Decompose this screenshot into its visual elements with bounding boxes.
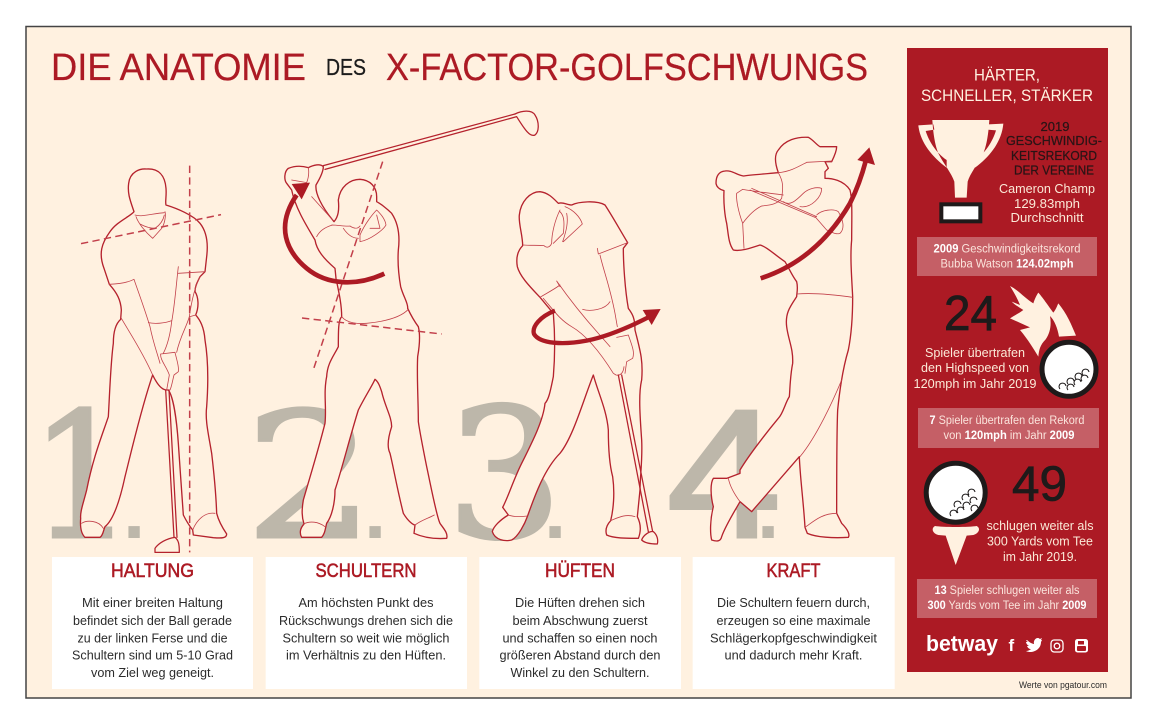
card: Kraft: Schlägerkopfgeschwindigkeit (710, 630, 877, 645)
stat: 24: 24 (944, 287, 997, 341)
step number 4: . (757, 466, 779, 555)
card: Kraft: KRAFT (766, 560, 821, 582)
panel heading: HÄRTER, (974, 66, 1040, 84)
card: Schultern: Schultern so weit wie möglich (282, 630, 450, 645)
callout: 2009 speed record (917, 237, 1097, 276)
step number 2: . (364, 466, 386, 555)
card: Hüften: Die Hüften drehen sich (515, 595, 645, 610)
record text: 129.83mph (1014, 196, 1080, 211)
icon: youtube (1075, 639, 1088, 652)
stat text: 24 players: den Highspeed von (921, 360, 1029, 375)
card: Haltung: Schultern sind um 5-10 Grad (72, 648, 233, 663)
record text: Cameron Champ (999, 181, 1095, 196)
card: Kraft: erzeugen so eine maximale (716, 613, 870, 628)
card: Hüften: Winkel zu den Schultern. (510, 665, 650, 680)
title: DIE ANATOMIE (51, 47, 306, 89)
card: Hüften: HÜFTEN (545, 560, 615, 582)
arrow: hip turn (534, 309, 661, 343)
step number 3: 3 (446, 371, 563, 580)
stat text: 24 players: 120mph im Jahr 2019 (914, 376, 1036, 391)
panel: Härter, schneller, stärker (907, 48, 1108, 672)
card: Schultern: Rückschwungs drehen sich die (279, 613, 453, 628)
record text: 2019 (1040, 119, 1070, 134)
icon: flaming golf ball (1010, 286, 1096, 396)
card: Haltung: Mit einer breiten Haltung (82, 595, 223, 610)
callout: 2009 120mph: von 120mph im Jahr 2009 (944, 430, 1074, 442)
card: Kraft: und dadurch mehr Kraft. (724, 648, 862, 663)
card: Haltung: zu der linken Ferse und die (78, 630, 228, 645)
callout: 2009 120mph (918, 408, 1099, 448)
card: Haltung: befindet sich der Ball gerade (73, 613, 232, 628)
callout: 2009 speed record: 2009 Geschwindigkeitsrekord (934, 244, 1080, 256)
callout: 2009 300 yards (917, 579, 1097, 618)
icon: twitter (1026, 638, 1042, 652)
icon: trophy (918, 120, 1003, 221)
callout: 2009 300 yards: 13 Spieler schlugen weiter als (934, 585, 1080, 597)
golf club 3 (618, 375, 658, 544)
panel heading: SCHNELLER, STÄRKER (921, 87, 1093, 105)
stance guide lines (81, 166, 221, 552)
stat text: 49 players: im Jahr 2019. (1003, 549, 1077, 564)
card: Hüften: größeren Abstand durch den (500, 648, 660, 663)
source note: Werte von pgatour.com (1019, 680, 1107, 691)
golfer 1: stance (80, 166, 227, 552)
arrow: shoulder turn (285, 183, 384, 282)
panel heading (921, 66, 1093, 105)
card: Haltung: vom Ziel weg geneigt. (91, 665, 214, 680)
title: DES (326, 54, 366, 80)
card: Haltung: HALTUNG (111, 560, 194, 582)
golfer 3: hips (492, 192, 661, 544)
record text (999, 119, 1102, 225)
rotation guide lines (302, 162, 442, 372)
icon: golf ball on tee (926, 463, 985, 565)
golf club head 2 (515, 111, 538, 135)
card: Haltung (52, 557, 253, 689)
record text: GESCHWINDIG- (1006, 133, 1102, 148)
card: Hüften: und schaffen so einen noch (502, 630, 658, 645)
step number 2: 2 (244, 376, 376, 579)
card: Schultern: Am höchsten Punkt des (298, 595, 434, 610)
callout: 2009 speed record: Bubba Watson 124.02mph (940, 259, 1074, 271)
stat: 49: 49 (1012, 458, 1067, 512)
step number 1: 1 (30, 376, 134, 579)
golfer 4: power (711, 137, 875, 541)
golf club 1 (155, 390, 179, 552)
stat text: 49 players: schlugen weiter als (986, 518, 1094, 533)
icon: facebook: f (1008, 636, 1014, 655)
title: X-FACTOR-GOLFSCHWUNGS (386, 47, 868, 89)
stat text: 49 players: 300 Yards vom Tee (987, 534, 1093, 549)
logo: betway: betway (926, 631, 999, 656)
record text: DER VEREINE (1014, 162, 1094, 177)
callout: 2009 300 yards: 300 Yards vom Tee im Jahr 2009 (928, 600, 1086, 612)
stat text: 49 players (986, 518, 1094, 564)
record text: Durchschnitt (1010, 210, 1084, 225)
step number 3: . (544, 466, 566, 555)
step number 1: . (123, 466, 145, 555)
card: Schultern: im Verhältnis zu den Hüften. (286, 648, 446, 663)
card: Kraft: Die Schultern feuern durch, (717, 595, 870, 610)
arrow: follow-through (761, 147, 875, 278)
card: Schultern: SCHULTERN (316, 560, 416, 582)
card: Hüften: beim Abschwung zuerst (512, 613, 648, 628)
golfer 2: shoulders (285, 111, 538, 539)
icon: instagram (1051, 640, 1063, 652)
stat text: 24 players (914, 345, 1036, 391)
card: Schultern (266, 557, 467, 689)
stat text: 24 players: Spieler übertrafen (925, 345, 1025, 360)
card: Hüften (479, 557, 681, 689)
step number 4: 4 (666, 371, 782, 576)
callout: 2009 120mph: 7 Spieler übertrafen den Rekord (930, 415, 1084, 427)
card: Kraft (693, 557, 895, 689)
record text: KEITSREKORD (1011, 148, 1097, 163)
title (51, 47, 868, 89)
social icons (1008, 636, 1088, 655)
